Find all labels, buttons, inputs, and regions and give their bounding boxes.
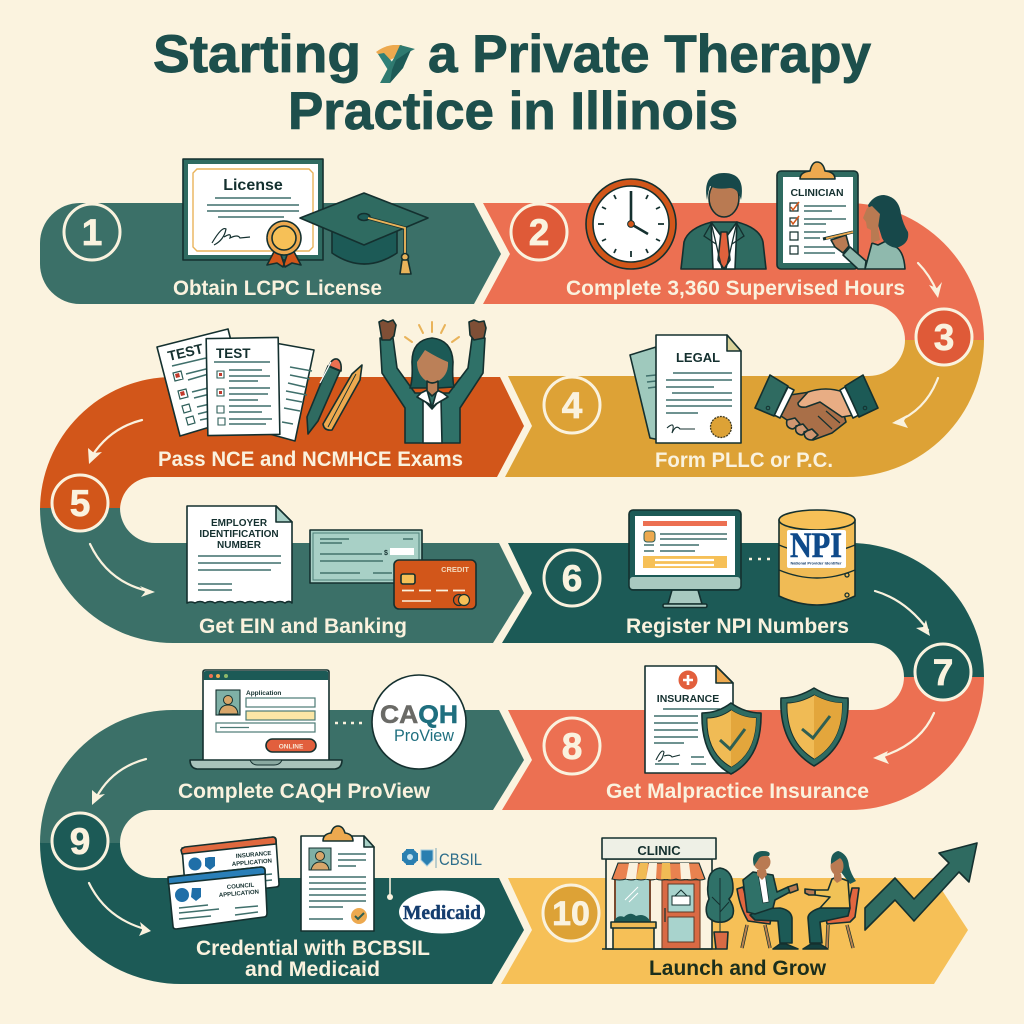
title [153,25,872,141]
icon: computer monitor [629,510,741,608]
label: step 9: Credential with BCBSIL [196,937,430,960]
icon: insurance document [645,666,733,773]
panel: step 7 band [40,710,524,843]
icon: NPI database: National Provider Identifier [790,560,842,566]
icon: growth arrow [865,843,977,930]
step 6 number [544,550,600,606]
icon: client seated [803,851,859,949]
icon: NPI database [779,510,855,605]
step 1 number [64,204,120,260]
icon: license certificate: License [223,177,283,194]
icon: potted plant [706,868,733,949]
icon: title leaf logo [376,45,415,83]
icon: BCBSIL logo: CBSIL [439,850,482,869]
panel: step 9 band [40,843,524,984]
icon: clinic storefront [602,838,716,949]
icon: NPI database: NPI [790,525,842,565]
step 4 number [544,377,600,433]
label: step 2: Complete 3,360 Supervised Hours [566,277,905,300]
icon: EIN document: EMPLOYER [211,518,268,529]
label: step 9 [196,937,430,981]
step 9 number: 9 [70,821,90,862]
label: step 8: Get Malpractice Insurance [606,780,869,803]
arrow: 6 to 7 [875,591,930,636]
label: step 5: Get EIN and Banking [199,615,407,638]
panel: step 2 band [483,203,984,340]
connector dots: monitor to registry [749,558,770,560]
icon: legal document [630,335,741,443]
icon: clock [586,179,676,269]
icon: laptop with application [190,670,342,769]
icon: large shield [781,688,848,766]
panel: step 10 band [501,878,968,984]
label: step 10: Launch and Grow [649,957,827,980]
label: step 9: and Medicaid [245,958,380,981]
step 5 number: 5 [70,483,90,524]
connector dots: laptop to CAQH [335,722,362,724]
step 6 number: 6 [562,558,582,599]
panel: step 1 band [40,203,501,304]
icon: insurance cards: INSURANCE [236,851,272,860]
step 3 number: 3 [934,317,954,358]
icon: credential document [301,826,374,931]
connector: credentials to payers [387,878,393,900]
label: step 6: Register NPI Numbers [626,615,849,638]
step 7 number [915,644,971,700]
step 8 number: 8 [562,726,582,767]
arrow: to 9 [92,759,146,805]
icon: CAQH ProView badge [372,675,466,769]
step 3 number [916,309,972,365]
icon: insurance cards: APPLICATION [232,859,272,868]
title: Practice in Illinois [288,82,738,141]
icon: celebrating woman [379,320,486,443]
icon: clinic storefront: CLINIC [637,843,681,858]
title: a Private Therapy [428,25,872,84]
icon: pen and pencil [307,359,362,434]
icon: CAQH ProView badge: ProView [394,726,455,745]
step 9 number [52,813,108,869]
icon: insurance cards: COUNCIL [227,883,255,891]
label: step 7: Complete CAQH ProView [178,780,431,803]
step 5 number [52,475,108,531]
step 1 number: 1 [82,212,102,253]
step 7 number: 7 [933,652,953,693]
icon: graduation cap [300,193,428,274]
icon: insurance document: INSURANCE [657,693,719,705]
icon: credit card: CREDIT [441,565,469,574]
step 10 number: 10 [552,895,590,933]
icon: Medicaid badge: Medicaid [403,902,481,924]
title: Starting [153,25,361,84]
icon: EIN document: IDENTIFICATION [199,529,279,540]
icon: insurance cards: APPLICATION [219,890,259,899]
icon: test papers: TEST [216,346,251,361]
arrow: 5 to EIN [90,544,155,597]
label: step 1: Obtain LCPC License [173,277,382,300]
label: step 3: Pass NCE and NCMHCE Exams [158,448,463,471]
icon: laptop with application: Application [246,690,281,697]
icon: bank check: $ [384,550,388,557]
icon: test papers [157,329,314,441]
arrow: to 5 [88,420,142,464]
icon: small shield [702,703,761,774]
panel: step 5 band [40,508,524,643]
icon: license certificate [183,159,323,267]
icon: handshake [755,375,878,440]
label: step 4: Form PLLC or P.C. [655,449,833,472]
icon: BCBSIL logo [402,848,482,869]
panel: step 3 band [40,377,524,510]
step 2 number [511,204,567,260]
icon: CAQH ProView badge: CAQH [380,701,458,729]
arrow: 7 to 8 [873,713,934,764]
icon: insurance cards [168,837,279,929]
step 10 number [543,885,599,941]
arrow: 3 to 4 [892,378,938,428]
icon: Medicaid badge [399,890,485,934]
icon: clinician woman [823,195,908,269]
icon: EIN document [187,506,292,603]
arrow: 2 to 3 [918,263,942,298]
icon: clinician clipboard [777,162,858,269]
icon: test papers: TEST [166,340,205,364]
panel: step 4 band [505,340,984,477]
panel: step 8 band [502,677,984,810]
icon: therapist seated [737,851,798,949]
step 8 number [544,718,600,774]
icon: supervisor [681,173,766,269]
icon: laptop with application: ONLINE [279,744,304,750]
icon: credit card [394,560,476,609]
step 2 number: 2 [529,212,549,253]
icon: bank check [310,530,422,583]
arrow: 9 to credentials [89,883,151,936]
step 4 number: 4 [562,385,583,426]
panel: step 6 band [502,543,984,677]
icon: EIN document: NUMBER [217,540,262,551]
icon: legal document: LEGAL [676,350,720,365]
icon: clinician clipboard: CLINICIAN [790,187,844,199]
